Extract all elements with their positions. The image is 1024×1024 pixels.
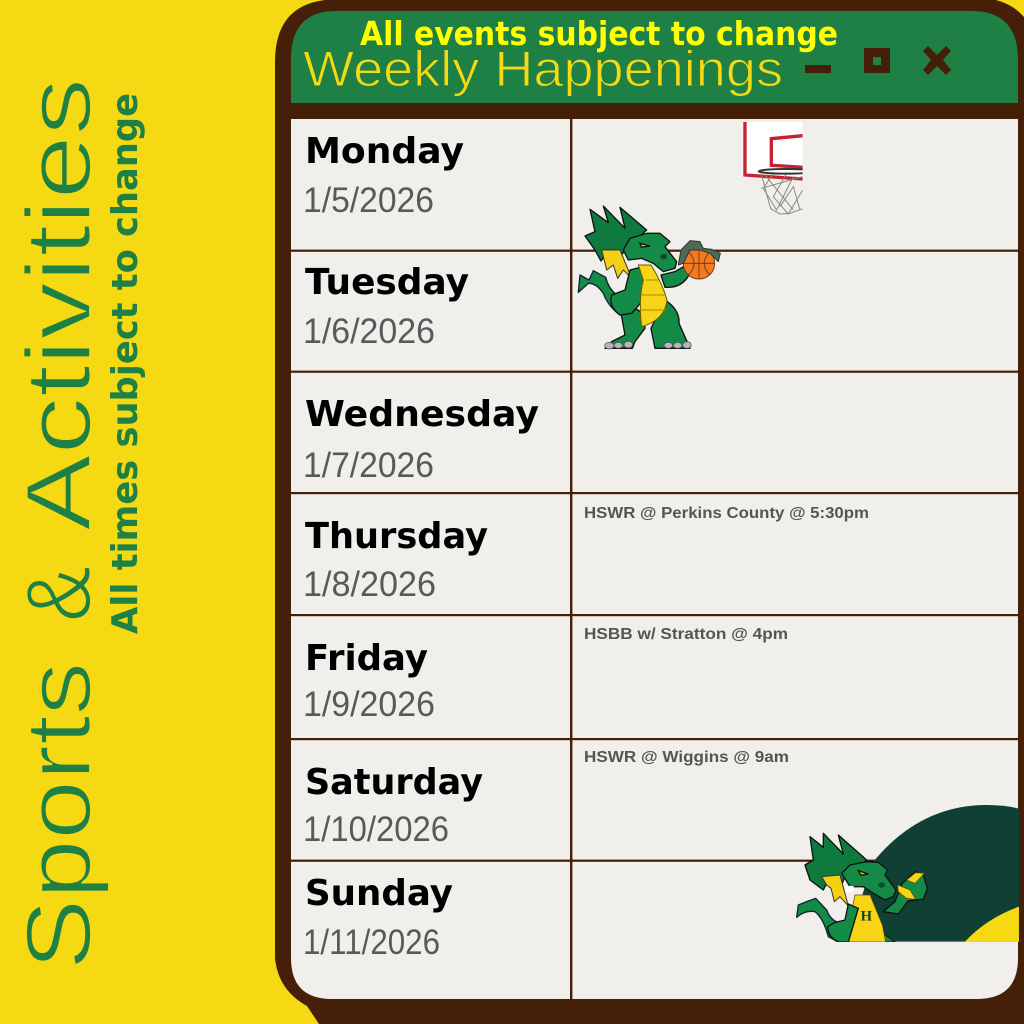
tail bbox=[578, 271, 620, 315]
icon: dragon with basketball bbox=[578, 206, 720, 349]
basketball bbox=[683, 248, 715, 279]
vertical title: Sports & Activities bbox=[8, 78, 110, 970]
row: Sunday bbox=[303, 873, 453, 962]
row: Wednesday bbox=[303, 394, 539, 485]
wing membrane bbox=[822, 875, 848, 906]
row: Sunday: Sunday bbox=[305, 873, 453, 914]
row: Saturday: 1/10/2026 bbox=[303, 810, 449, 849]
toes bbox=[605, 341, 691, 349]
heading: Weekly Happenings: Weekly Happenings bbox=[303, 41, 783, 97]
row: Tuesday: 1/6/2026 bbox=[303, 312, 435, 351]
row: Tuesday bbox=[303, 262, 469, 351]
row: Friday: Friday bbox=[305, 638, 428, 679]
event: Friday basketball: HSBB w/ Stratton @ 4pm bbox=[584, 626, 788, 643]
row: Wednesday: Wednesday bbox=[305, 394, 539, 435]
row: Thursday bbox=[303, 516, 488, 604]
reaching arm bbox=[661, 267, 689, 287]
vertical title: Sports & Activities: Sports bbox=[8, 662, 110, 970]
leg bbox=[884, 934, 896, 942]
icon: dragon mascot in jersey bbox=[797, 833, 927, 942]
arm bbox=[828, 904, 858, 942]
head bbox=[842, 862, 896, 900]
row: Sunday: 1/11/2026 bbox=[303, 923, 440, 962]
icon: dragon mascot in jersey: H bbox=[861, 909, 873, 925]
row: Thursday: 1/8/2026 bbox=[303, 565, 436, 604]
row: Wednesday: 1/7/2026 bbox=[303, 446, 434, 485]
row: Saturday bbox=[303, 762, 483, 849]
vertical note: All times subject to change: All times subject to change bbox=[105, 93, 146, 634]
row: Thursday: Thursday bbox=[305, 516, 488, 557]
table grid lines bbox=[291, 119, 1018, 999]
wing bbox=[805, 833, 867, 893]
title bar note: All events subject to change bbox=[360, 14, 838, 53]
wing membrane bbox=[602, 250, 632, 278]
head bbox=[623, 233, 677, 272]
event: Saturday wrestling: HSWR @ Wiggins @ 9am bbox=[584, 749, 789, 766]
row: Monday: 1/5/2026 bbox=[303, 181, 434, 220]
row: Tuesday: Tuesday bbox=[305, 262, 469, 303]
row: Friday: 1/9/2026 bbox=[303, 685, 435, 724]
row: Saturday: Saturday bbox=[305, 762, 483, 803]
icon: close bbox=[923, 46, 951, 75]
arm bbox=[611, 267, 643, 315]
panel: title bar bbox=[291, 11, 1018, 103]
wing bbox=[585, 206, 647, 261]
icon: basketball hoop bbox=[743, 122, 803, 215]
jersey bbox=[845, 895, 886, 942]
row: Monday: Monday bbox=[305, 131, 464, 172]
icon: minimize bbox=[805, 65, 831, 73]
vertical title: Sports & Activities: & bbox=[8, 566, 110, 622]
forearm and fist bbox=[883, 872, 927, 914]
icon: maximize bbox=[864, 48, 890, 73]
belly bbox=[638, 265, 667, 327]
vertical title: Sports & Activities: Activities bbox=[8, 78, 110, 531]
panel: schedule table background bbox=[291, 119, 1018, 999]
legs bbox=[605, 300, 690, 348]
row: Friday bbox=[303, 638, 435, 724]
tail bbox=[797, 898, 840, 942]
window frame bbox=[275, 0, 1024, 1024]
corner decoration: dark green circle and yellow arc bbox=[847, 805, 1019, 942]
row: Monday bbox=[303, 131, 464, 220]
claws bbox=[678, 241, 720, 265]
event: Thursday wrestling: HSWR @ Perkins County @ 5:30pm bbox=[584, 505, 869, 522]
